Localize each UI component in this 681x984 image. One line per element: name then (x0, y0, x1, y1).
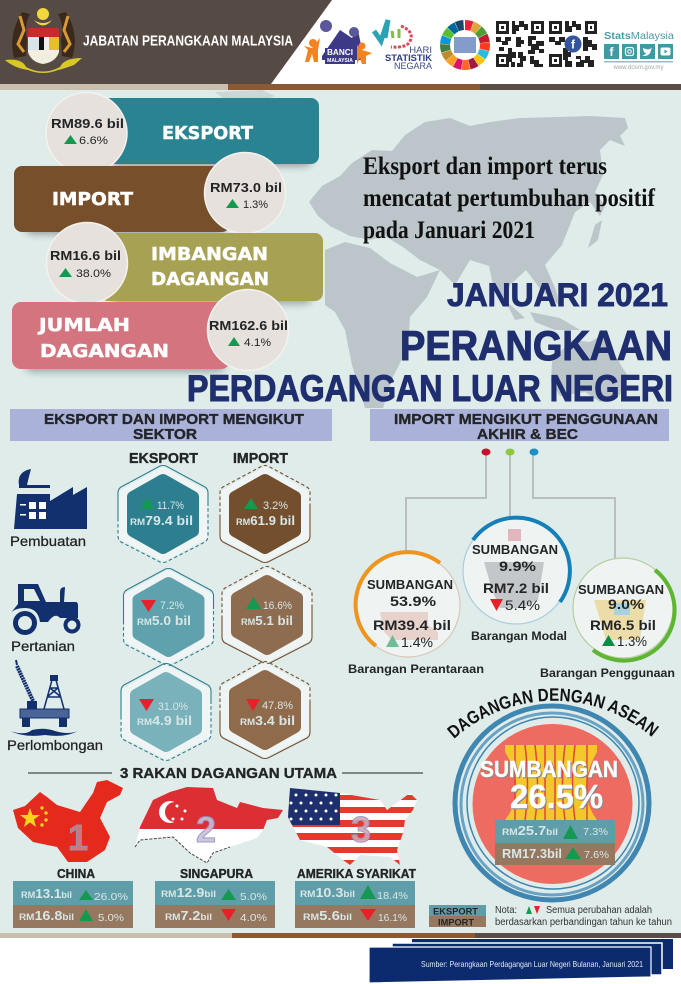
label: perlombongan: Perlombongan (7, 738, 103, 753)
panel: China figures: 5.0% (98, 912, 124, 924)
ASEAN figures table (495, 820, 615, 865)
heading: trade with ASEAN: DAGANGAN DENGAN ASEAN (446, 688, 660, 738)
logo: Hari Statistik Negara (374, 20, 433, 72)
title (187, 277, 673, 409)
contribution figure: 26.5% (510, 778, 603, 815)
logo: StatsMalaysia social links: www.dosm.gov.my (612, 65, 664, 71)
circle: intermediate goods: 53.9% (390, 593, 437, 609)
hexagon: import agriculture: RM5.1 bil (241, 613, 293, 628)
hexagon: export manufacturing (118, 466, 208, 562)
world map backdrop (215, 90, 628, 408)
column label: import: IMPORT (233, 450, 288, 467)
label: pertanian: Pertanian (11, 639, 75, 654)
headline statement: pada Januari 2021 (363, 217, 535, 244)
circle: consumption goods: SUMBANGAN (578, 582, 664, 597)
circle: capital goods: 5.4% (505, 597, 540, 613)
panel: United States figures: 18.4% (377, 890, 408, 902)
circle: consumption goods: 9.0% (608, 596, 645, 612)
logo: Hari Statistik Negara: STATISTIK (385, 53, 432, 64)
ASEAN figures table: RM25.7 bil (502, 823, 558, 838)
panel: Singapore figures: SINGAPURA (180, 867, 253, 881)
bar: jumlah dagangan: 4.1% (244, 337, 271, 349)
legend: export and import colours (429, 905, 486, 928)
heading: export and import by sector: SEKTOR (133, 426, 197, 443)
panel: United States figures: RM5.6 bil (303, 908, 352, 923)
panel: Singapore figures (155, 867, 275, 928)
map: Singapore: 2 (196, 809, 216, 850)
column label: eksport: EKSPORT (129, 450, 198, 467)
panel: China figures: RM16.8 bil (19, 908, 74, 923)
circle: consumption goods: 1.3% (617, 633, 647, 649)
circle: intermediate goods (356, 552, 460, 657)
icon: factory (14, 469, 87, 529)
logo: Hari Statistik Negara: NEGARA (394, 61, 433, 72)
note: berdasarkan perbandingan tahun ke tahun (495, 917, 672, 928)
ASEAN figures table: 7.3% (583, 826, 608, 838)
headline statement: mencatat pertumbuhan positif (363, 185, 656, 212)
logo: Banci Malaysia: MALAYSIA (327, 58, 353, 64)
label: barangan penggunaan: Barangan Penggunaan (540, 668, 675, 680)
title: JANUARI 2021 (447, 277, 668, 313)
icon: oil rig (10, 660, 78, 736)
contribution figure: SUMBANGAN (480, 756, 618, 782)
heading: import by end use (370, 409, 669, 443)
bar: eksport: EKSPORT (162, 123, 254, 144)
map: China: 1 (68, 817, 88, 858)
circle: intermediate goods: SUMBANGAN (367, 577, 453, 592)
QR code: Facebook (549, 21, 597, 67)
label: barangan modal: Barangan Modal (471, 631, 567, 643)
heading: import by end use: IMPORT MENGIKUT PENGGUNAAN (394, 411, 658, 428)
panel: ASEAN emblem (455, 706, 649, 900)
circle: capital goods (463, 518, 570, 624)
logo: Banci Malaysia: BANCI (327, 48, 353, 57)
note: Nota: (495, 905, 517, 916)
icon: tractor (10, 584, 78, 632)
hexagon: export agriculture (124, 568, 214, 666)
bar: imbangan dagangan: 38.0% (76, 268, 111, 280)
bar: import: IMPORT (52, 189, 134, 210)
bar: eksport: 6.6% (79, 135, 108, 147)
contribution figure: 26.5% (511, 779, 604, 816)
hexagon: import manufacturing: RM61.9 bil (236, 513, 295, 528)
connector lines for end-use circles (406, 448, 615, 558)
logo: Sustainable Development Goals wheel (437, 17, 493, 73)
logo: StatsMalaysia social links (604, 31, 674, 71)
hexagon: import agriculture (222, 566, 312, 664)
footer: source ribbon (369, 939, 673, 983)
contribution figure: SUMBANGAN (481, 757, 619, 783)
panel: Singapore figures: 5.0% (240, 891, 267, 903)
circle: intermediate goods: RM39.4 bil (373, 617, 451, 633)
map: United States (288, 788, 417, 865)
hexagon: import mining (220, 662, 310, 758)
panel: United States figures: 16.1% (378, 912, 407, 924)
legend: export and import colours: EKSPORT (433, 906, 478, 918)
panel: United States figures: RM10.3 bil (300, 885, 355, 900)
circle: capital goods: SUMBANGAN (472, 542, 558, 557)
panel: Singapore figures: RM7.2bil (165, 908, 212, 923)
bottom rule (0, 933, 681, 938)
map: Singapore (134, 787, 283, 863)
bar: import: 1.3% (243, 199, 268, 211)
ASEAN figures table: 7.6% (584, 849, 609, 861)
circle: consumption goods: RM6.5 bil (590, 617, 656, 633)
logo: StatsMalaysia social links: f (610, 45, 614, 59)
heading: import by end use: AKHIR & BEC (477, 426, 578, 443)
hexagon: export mining (121, 664, 211, 760)
panel: China figures (13, 867, 133, 928)
panel: trade headline bars (12, 92, 323, 372)
circle: intermediate goods: 1.4% (401, 634, 433, 650)
hexagon: export mining: 31.0% (158, 701, 188, 713)
heading: export and import by sector: EKSPORT DAN IMPORT MENGIKUT (44, 411, 304, 428)
logo: Banci Malaysia (304, 20, 372, 64)
map: United States: 3 (351, 809, 371, 850)
note: Semua perubahan adalah (546, 905, 652, 916)
panel: China figures: RM13.1bil (21, 886, 72, 901)
bar: imbangan dagangan: DAGANGAN (151, 269, 269, 290)
header band (0, 0, 681, 90)
hexagon: export manufacturing: RM79.4 bil (130, 513, 193, 528)
agency name: JABATAN PERANGKAAN MALAYSIA (83, 32, 293, 50)
panel: Singapore figures: RM12.9 bil (161, 885, 216, 900)
label: pembuatan: Pembuatan (10, 534, 86, 549)
bar: eksport: RM89.6 bil (51, 116, 124, 131)
hexagon: export agriculture: 7.2% (160, 600, 184, 612)
panel: Singapore figures: 4.0% (240, 912, 267, 924)
legend: export and import colours: IMPORT (438, 918, 474, 928)
hexagon: import manufacturing (220, 466, 310, 562)
bar: imbangan dagangan (46, 222, 323, 304)
panel: China figures: 26.0% (94, 891, 128, 903)
map: China (13, 780, 123, 862)
bar: eksport (46, 92, 319, 174)
headline statement (363, 153, 656, 244)
bar: jumlah dagangan: RM162.6 bil (209, 318, 288, 333)
contribution figure (480, 756, 619, 816)
bar: import: RM73.0 bil (210, 180, 282, 195)
hexagon: export agriculture: RM5.0 bil (137, 613, 191, 628)
hexagon: export manufacturing: 11.7% (157, 500, 184, 512)
logo: Hari Statistik Negara: HARI (409, 45, 432, 56)
decorative rule colours (0, 84, 228, 90)
panel: United States figures (295, 867, 416, 928)
panel: China figures: CHINA (57, 867, 95, 881)
circle: capital goods: 9.9% (499, 558, 537, 574)
QR code: web site (496, 21, 544, 67)
note (495, 905, 672, 928)
bar: jumlah dagangan: JUMLAH (37, 315, 130, 336)
footer: source ribbon: Sumber: Perangkaan Perdagangan Luar Negeri Bulanan, Januari 2021 (421, 959, 643, 969)
heading: top three trading partners: 3 RAKAN DAGANGAN UTAMA (120, 765, 337, 782)
bar: import (14, 152, 286, 234)
hexagon: import agriculture: 16.6% (263, 600, 292, 612)
hexagon: import mining: RM3.4 bil (240, 713, 295, 728)
icon: Malaysian coat of arms (5, 8, 82, 73)
QR code: Facebook: f (571, 38, 576, 52)
ASEAN paddy stalks (505, 745, 597, 820)
label: barangan perantaraan: Barangan Perantaraan (348, 664, 484, 676)
bar: imbangan dagangan: IMBANGAN (151, 244, 268, 265)
circle: consumption goods (573, 558, 675, 661)
bar: imbangan dagangan: RM16.6 bil (50, 248, 121, 263)
circle: capital goods: RM7.2 bil (483, 580, 549, 596)
bar: jumlah dagangan: DAGANGAN (40, 341, 169, 362)
logo: StatsMalaysia social links: StatsMalaysia (604, 31, 674, 42)
hexagon: import manufacturing: 3.2% (263, 500, 288, 512)
headline statement: Eksport dan import terus (363, 153, 607, 180)
bar: jumlah dagangan (12, 290, 288, 372)
hexagon: export mining: RM4.9 bil (137, 713, 192, 728)
ASEAN figures table: RM17.3bil (502, 846, 562, 861)
hexagon: import mining: 47.8% (262, 700, 293, 712)
heading: export and import by sector (10, 409, 332, 443)
panel: United States figures: AMERIKA SYARIKAT (297, 867, 416, 881)
